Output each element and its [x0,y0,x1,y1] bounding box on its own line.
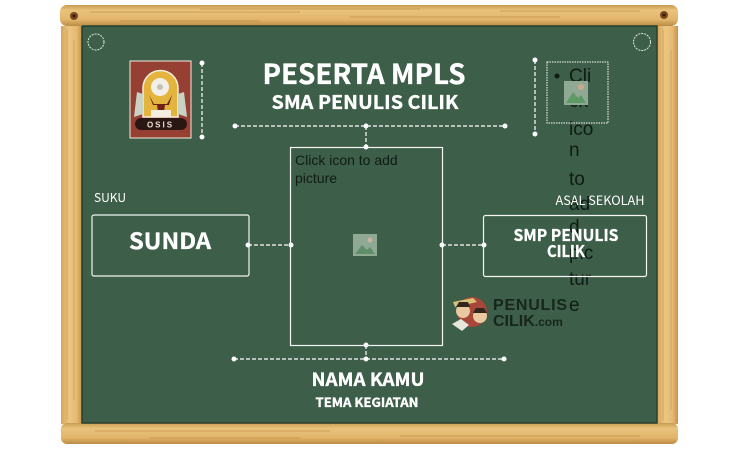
label: suku: SUKU [94,189,126,206]
small picture placeholder: pic [569,243,593,264]
box: asal sekolah [484,216,646,276]
OSIS logo [130,61,191,138]
small picture placeholder: to [569,169,585,190]
OSIS logo: OSIS [147,120,174,130]
penulis cilik logo: CILIK [493,313,535,330]
central picture placeholder: picture [295,170,337,186]
small picture placeholder: n [569,140,580,161]
box: asal sekolah: CILIK [547,238,586,262]
corner ring right [634,34,650,50]
corner ring left [88,34,104,50]
small picture placeholder: d [569,217,580,238]
name: NAMA KAMU [312,366,424,392]
small picture placeholder: ck [569,91,588,112]
penulis cilik logo: PENULIS [493,297,567,314]
small picture placeholder: ico [569,119,593,140]
central picture placeholder [290,148,442,346]
title: PESERTA MPLS [262,53,466,93]
chalkboard [80,24,659,425]
small picture placeholder: Cli [569,66,591,87]
box: suku: SUNDA [129,224,212,256]
dashed connectors [202,60,535,359]
penulis cilik logo [452,297,567,331]
label: asal sekolah: ASAL SEKOLAH [556,190,644,209]
small picture placeholder: tur [569,269,592,290]
connector dots [200,58,538,362]
central picture placeholder: Click icon to add [295,152,398,168]
box: suku [92,215,249,276]
penulis cilik logo: .com [535,315,563,329]
box: asal sekolah: SMP PENULIS [514,222,619,246]
small picture placeholder [547,62,608,316]
small picture placeholder: e [569,295,580,316]
theme: TEMA KEGIATAN [316,392,418,411]
subtitle: SMA PENULIS CILIK [272,88,459,115]
small picture placeholder: ad [569,194,590,215]
